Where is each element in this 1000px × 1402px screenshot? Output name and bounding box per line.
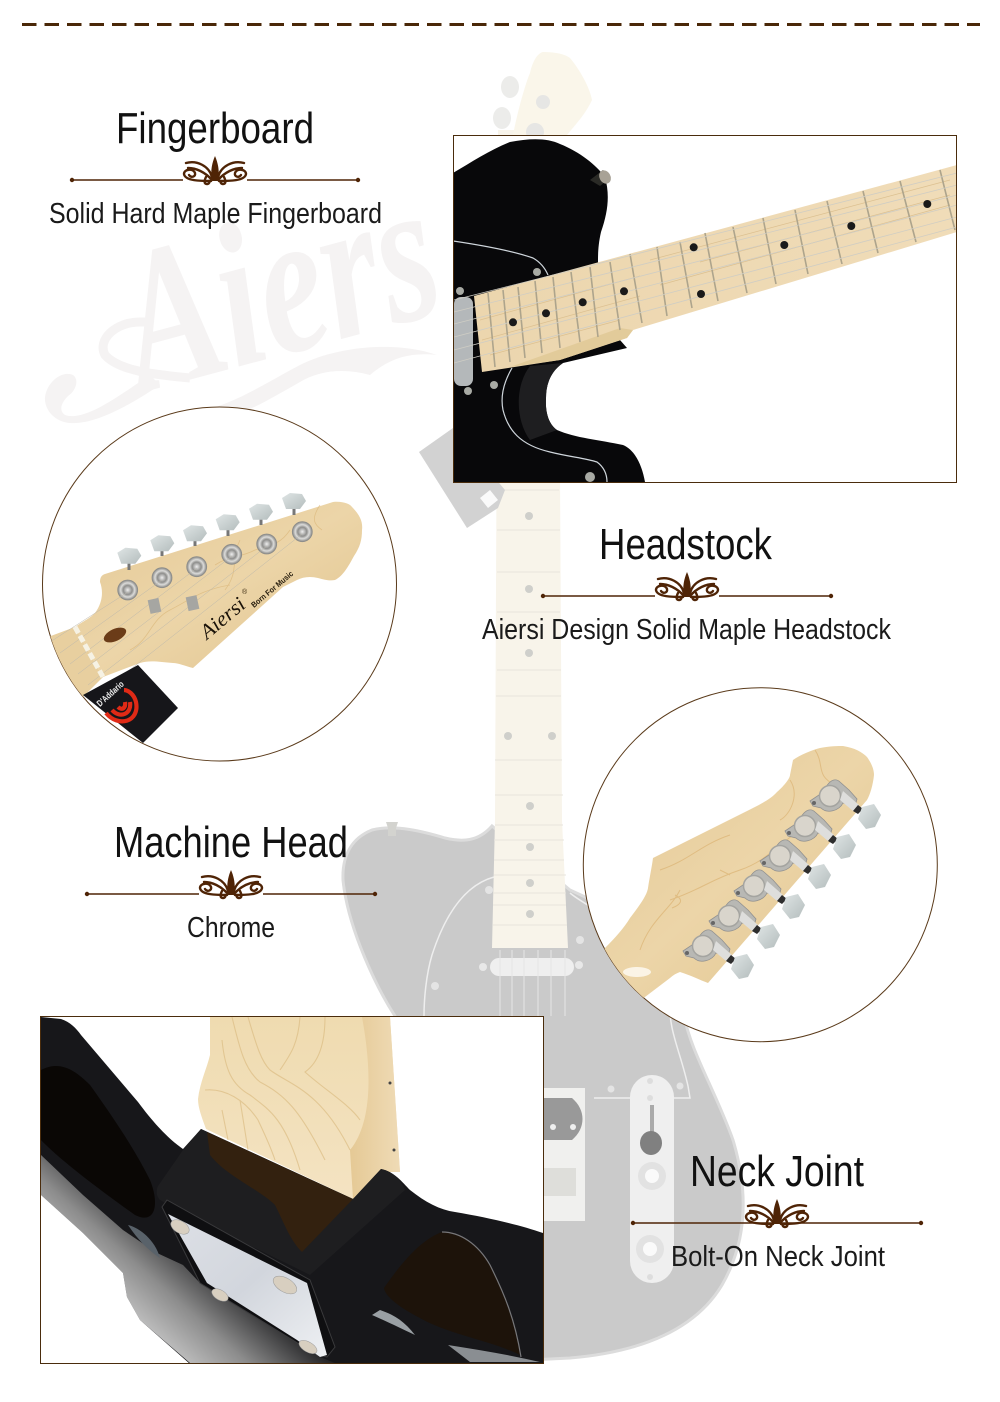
ornament divider — [70, 156, 360, 184]
title: Headstock: Headstock — [599, 520, 773, 569]
nut — [75, 627, 103, 677]
brand tagline: Born For Music — [250, 569, 295, 610]
headstock wood — [75, 502, 362, 677]
tag logo — [106, 690, 136, 721]
brand logo: Aiersi — [193, 592, 250, 645]
fret markers — [509, 200, 931, 326]
frets — [488, 170, 955, 367]
ghost strap button — [386, 822, 398, 836]
tuner 6 — [810, 780, 881, 829]
back of neck — [198, 1017, 400, 1199]
description: Fingerboard: Solid Hard Maple Fingerboard — [49, 198, 382, 230]
ornament divider — [631, 1199, 923, 1227]
tuner 3 — [734, 870, 805, 919]
tuner knobs — [117, 493, 306, 564]
pickguard lines — [453, 241, 607, 482]
hang tag — [83, 665, 178, 743]
heel block — [157, 1129, 405, 1275]
brown window reflection — [384, 1232, 520, 1355]
back of headstock wood — [590, 746, 874, 1010]
neck grain — [205, 1017, 360, 1170]
description: Neck Joint: Bolt-On Neck Joint — [671, 1241, 885, 1273]
dots on side of neck — [388, 1082, 396, 1152]
wood reflection in block — [207, 1132, 353, 1252]
dark reflection on upper body — [41, 1066, 155, 1218]
string trees — [148, 595, 199, 614]
black guitar body — [41, 1017, 543, 1363]
heading group: Neck Joint — [631, 1147, 923, 1273]
description: Machine Head: Chrome — [187, 912, 275, 944]
title: Neck Joint: Neck Joint — [690, 1147, 864, 1196]
panel: fingerboard photo — [453, 136, 957, 482]
heading group: Machine Head — [85, 818, 377, 944]
ghost strings — [500, 950, 565, 1016]
guitar body black — [453, 139, 645, 482]
white area below body — [41, 1195, 190, 1364]
body shading — [519, 363, 563, 440]
ghost hang tag — [419, 428, 505, 528]
chrome neck plate — [168, 1214, 327, 1357]
title: Machine Head: Machine Head — [114, 818, 348, 867]
panel: neck joint photo — [40, 1016, 544, 1364]
strings — [50, 534, 302, 695]
ghost guitar body — [343, 826, 743, 1360]
truss rod hole — [104, 628, 126, 642]
neck side face — [350, 1017, 400, 1199]
tuner 1 — [683, 930, 754, 979]
ghost bridge — [544, 1088, 585, 1221]
ghost pickguard outline — [424, 877, 690, 1098]
title: Fingerboard: Fingerboard — [116, 104, 314, 153]
ghost neck pickup — [431, 886, 584, 990]
tag text: D'Addario — [95, 679, 126, 708]
ornament divider — [85, 870, 377, 898]
ornament divider — [541, 572, 833, 600]
gloss highlight — [623, 967, 651, 977]
maple neck — [474, 165, 957, 372]
screws — [456, 268, 595, 482]
heading group: Headstock — [482, 520, 891, 646]
plate screws — [168, 1217, 319, 1356]
registered mark: ® — [242, 588, 248, 596]
tuner stems — [129, 507, 294, 570]
neck plate frame — [162, 1200, 335, 1357]
panel: headstock photo circle — [40, 407, 396, 761]
ghost guitar in background — [343, 52, 743, 1360]
description: Headstock: Aiersi Design Solid Maple Headstock — [482, 614, 891, 646]
gloss highlight on body — [128, 1225, 160, 1258]
panel: machine head photo circle — [583, 688, 937, 1042]
neck pickup — [454, 297, 473, 386]
tuner 4 — [760, 840, 831, 889]
tuner 5 — [785, 810, 856, 859]
body lower-left grey — [41, 1155, 335, 1363]
top dashed divider — [22, 23, 980, 26]
back grain — [640, 750, 835, 950]
ghost control plate — [630, 1075, 674, 1283]
tuner 2 — [709, 900, 780, 949]
strap button — [590, 170, 611, 186]
watermark: Aiersi logo — [45, 134, 461, 439]
heading group: Fingerboard — [49, 104, 382, 230]
fretboard end — [50, 627, 103, 697]
watermark: Aiersi logo: Aiers — [85, 134, 461, 439]
strings — [454, 173, 957, 363]
ghost neck and headstock — [492, 52, 592, 948]
tuner pegs — [118, 522, 312, 600]
lower gloss highlights — [372, 1310, 415, 1335]
headstock grain — [130, 505, 322, 650]
neck grain — [480, 180, 950, 355]
ghost pickguard screws — [608, 1082, 684, 1092]
